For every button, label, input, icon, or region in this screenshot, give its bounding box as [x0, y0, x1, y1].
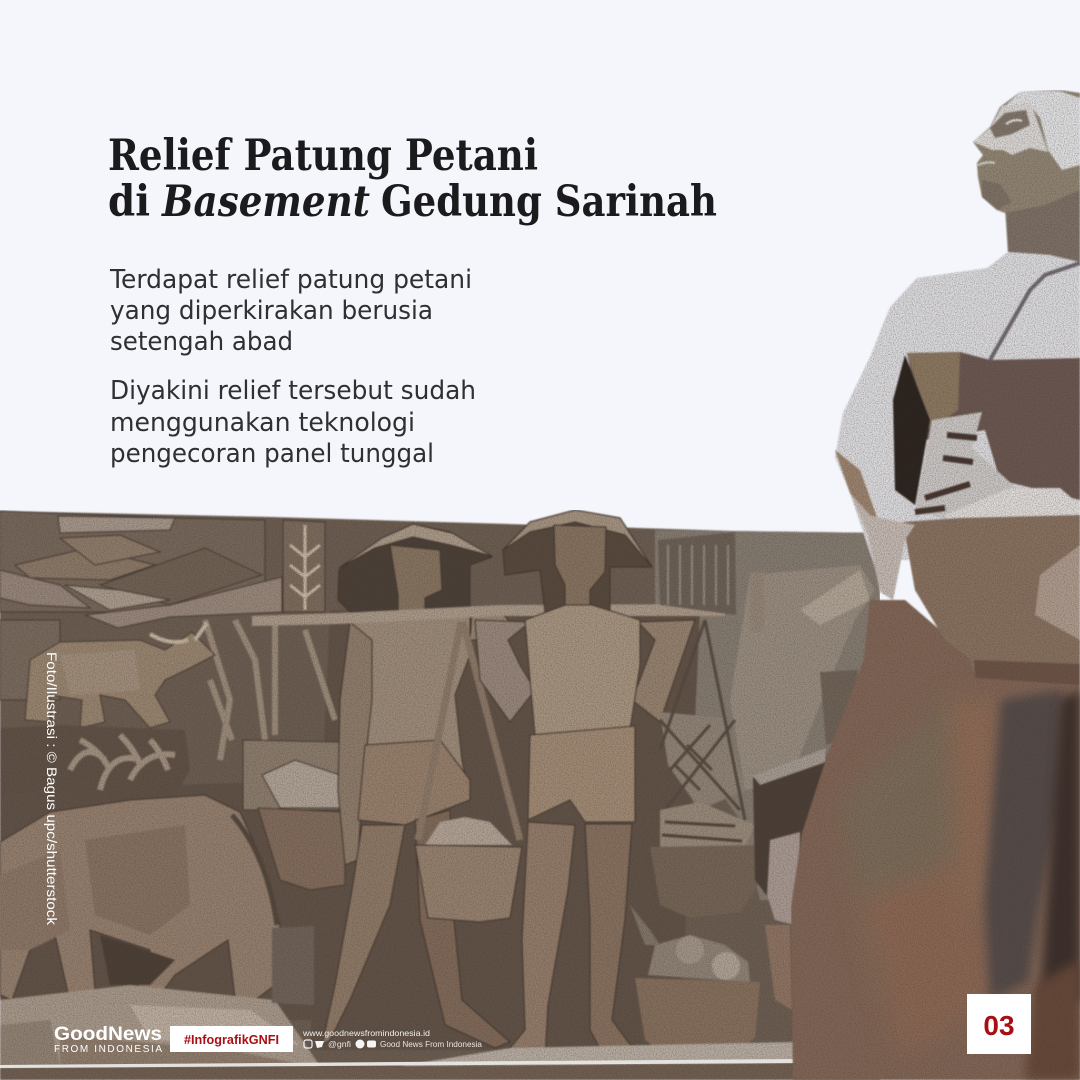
small figure behind statue	[753, 748, 830, 1010]
title: di	[108, 177, 150, 227]
paragraph one	[109, 265, 472, 357]
title: Relief Patung Petani	[108, 131, 538, 181]
title	[108, 131, 717, 227]
logo: GoodNews from Indonesia	[54, 1024, 162, 1055]
basket relief left	[243, 740, 345, 890]
website and social text: @gnfi	[328, 1040, 351, 1049]
paragraph one: yang diperkirakan berusia	[110, 296, 433, 326]
website and social text	[302, 1028, 483, 1049]
page number	[967, 994, 1031, 1054]
left wall tone	[0, 780, 330, 1020]
small cow relief	[25, 623, 215, 728]
logo: GoodNews from Indonesia: FROM INDONESIA	[54, 1044, 162, 1055]
lips	[978, 162, 995, 165]
skirt	[791, 600, 1080, 1080]
ground stones	[0, 985, 320, 1068]
hashtag badge: #InfografikGNFI	[184, 1032, 279, 1047]
basket with ropes one	[415, 622, 522, 922]
farmer two	[475, 510, 695, 1060]
logo: GoodNews from Indonesia: GoodNews	[54, 1024, 162, 1045]
leaf relief	[0, 725, 190, 802]
title: Gedung Sarinah	[381, 177, 717, 227]
forehead and nose	[973, 100, 1048, 155]
right wall section	[655, 530, 880, 900]
social icons	[304, 1040, 376, 1048]
paragraph two: menggunakan teknologi	[110, 408, 415, 438]
hashtag badge	[170, 1026, 293, 1052]
recess behind farmers	[310, 610, 700, 1050]
paragraph two: pengecoran panel tunggal	[110, 439, 434, 469]
statue of woman	[791, 90, 1080, 1080]
photo credit: Foto/Ilustrasi : © Bagus upc/shutterstock	[44, 652, 60, 926]
large buffalo relief	[0, 795, 280, 1002]
website and social text: www.goodnewsfromindonesia.id	[302, 1028, 430, 1038]
stone block	[272, 926, 314, 1005]
net and fish with basket	[650, 620, 760, 918]
arm and torso	[835, 252, 1080, 583]
paragraph one: setengah abad	[110, 327, 293, 357]
guard rail line	[0, 1059, 795, 1068]
title: Basement	[160, 177, 370, 227]
paragraph two: Diyakini relief tersebut sudah	[110, 376, 476, 406]
farmer one	[322, 524, 510, 1048]
hand at bowl	[850, 493, 915, 600]
thatch panel	[658, 532, 736, 615]
carrying pole	[252, 604, 725, 626]
mountain relief	[0, 511, 325, 700]
relief wall photo	[0, 510, 880, 1080]
eye socket	[990, 110, 1030, 138]
paragraph one: Terdapat relief patung petani	[109, 265, 472, 295]
hair	[1005, 91, 1080, 170]
paragraph two	[110, 376, 476, 469]
bowl	[903, 515, 1080, 685]
plant stems relief	[205, 620, 335, 760]
basket with stones	[630, 905, 760, 1055]
dark fold	[985, 690, 1062, 1000]
website and social text: Good News From Indonesia	[380, 1040, 483, 1049]
wall background	[0, 511, 880, 1080]
page number: 03	[983, 1010, 1015, 1041]
neck and face	[973, 90, 1080, 270]
net cloth relief	[730, 565, 875, 790]
bottom floor	[400, 1042, 795, 1066]
